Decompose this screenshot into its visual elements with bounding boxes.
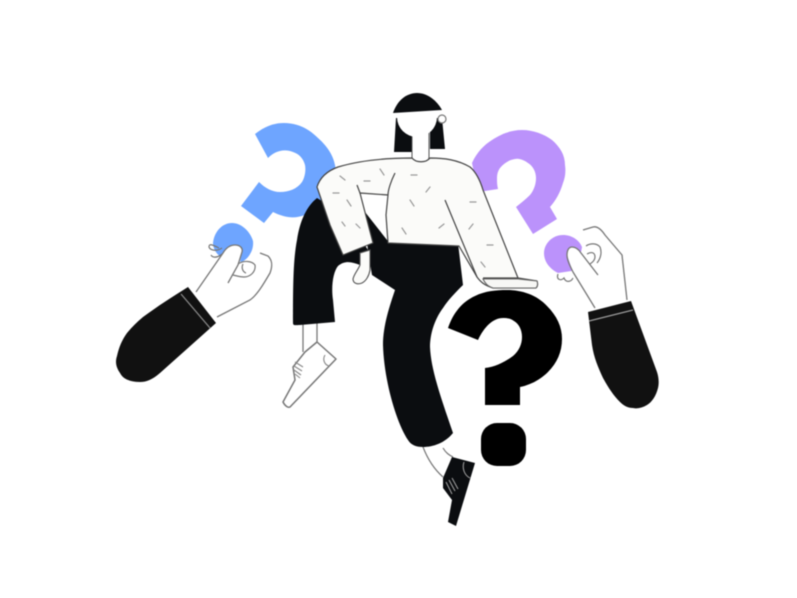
black question mark: [448, 290, 562, 466]
sweater cuff: [483, 279, 538, 288]
sweater: [317, 158, 538, 288]
left hand: [196, 245, 272, 317]
neck: [412, 130, 429, 163]
right hand with sleeve: [558, 227, 659, 408]
blue question mark: [213, 123, 336, 262]
right sleeve stripe: [589, 310, 633, 321]
hair back: [394, 118, 445, 152]
hand on knee: [353, 250, 370, 284]
back leg and foot: [283, 198, 368, 407]
right sleeve: [588, 301, 659, 408]
person: [283, 93, 538, 526]
left sleeve stripe: [181, 294, 210, 328]
front leg and foot: [365, 212, 475, 526]
ear: [438, 115, 446, 123]
purple question mark: [472, 130, 582, 273]
face: [397, 97, 437, 137]
right hand: [558, 227, 627, 308]
sweater speckles: [333, 169, 493, 267]
hair fringe: [393, 93, 442, 113]
left hand with sleeve: [116, 245, 272, 382]
left sleeve: [116, 287, 216, 382]
